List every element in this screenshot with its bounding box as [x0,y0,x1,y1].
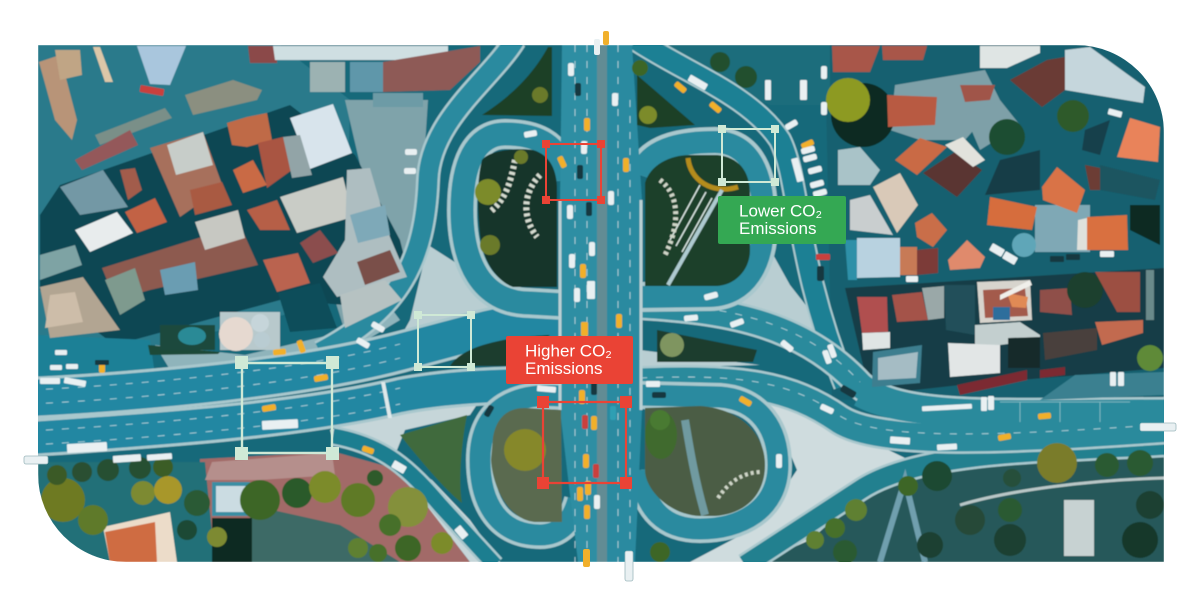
buildings: south-west block [103,478,1164,562]
marker box: pale green, middle left [414,311,475,371]
vehicles [40,63,1124,540]
icon: mosque domes [160,312,280,351]
buildings: west block [39,46,480,338]
ground areas [38,45,1164,562]
loop ramps [462,134,778,535]
marker box: red, bottom highway [537,396,632,489]
callout: Lower CO2 Emissions: Emissions [739,219,816,238]
callout: Higher CO2 Emissions [506,336,633,384]
callout: Higher CO2 Emissions: Emissions [525,359,602,378]
marker box: pale green, left highway [235,356,339,460]
east-west highway left [30,322,565,445]
garden islands [148,47,765,522]
trees [41,52,1164,564]
marker box: pale green, top right [718,125,779,186]
callout: Lower CO2 Emissions [718,196,846,244]
east-west highway right [640,302,1170,438]
outer ramps [320,40,1170,565]
callout: Lower CO2 Emissions: Lower CO₂ [739,202,822,220]
callout: Higher CO2 Emissions: Higher CO₂ [525,342,612,360]
pale plazas [330,240,905,562]
marker box: red, top highway [542,140,605,204]
buildings: north-east block [831,46,1160,280]
north-south highway [560,45,642,562]
buildings: east block [857,270,1164,400]
